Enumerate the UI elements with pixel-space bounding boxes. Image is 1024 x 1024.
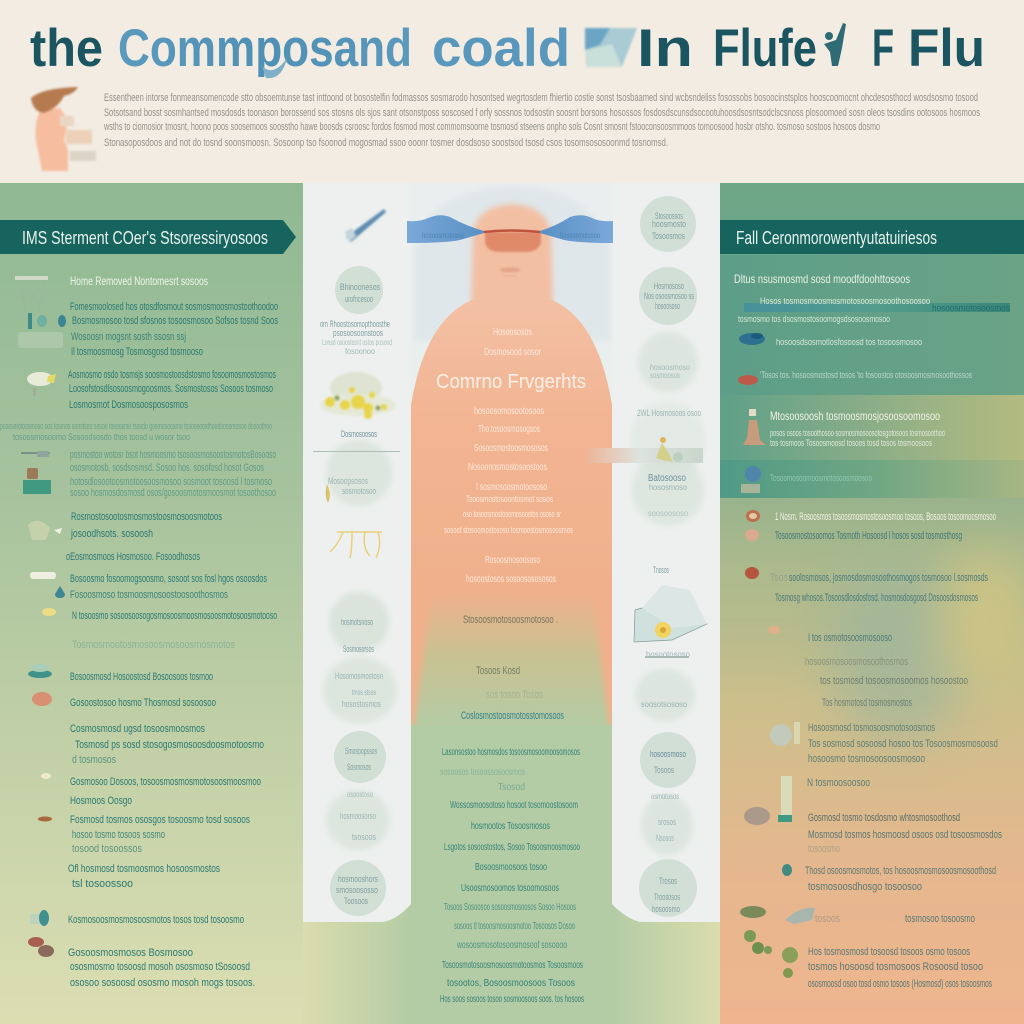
right list text: tosmosoosdhosgo tosoosoo <box>808 881 922 893</box>
icon: small pale dot <box>41 773 51 779</box>
right circle labels: hosoososo <box>655 301 680 311</box>
icon: small tan shell <box>768 626 780 634</box>
centre lower text: Lsgotos sosoostostos, Sosoo Tosoosmoosmosoo <box>444 842 580 853</box>
intro paragraph <box>103 92 980 149</box>
right list text: Hosos tosmosmoosmosmotosoosmosoothosoosoo <box>760 296 930 307</box>
title: F <box>872 19 894 78</box>
left circle labels: fosoonoo <box>345 347 375 356</box>
left list text: Tosmosd ps sosd stosogosmosoosdoosmotoosmo <box>75 739 264 751</box>
left circle labels: hosmoosorso <box>340 811 376 821</box>
right circle labels: hoosmosto <box>652 219 686 229</box>
icon: white and yellow bird <box>27 372 56 396</box>
icon: yellow flowers <box>320 372 396 419</box>
left list text: Rosmostosootosmosmostoosmosoosmotoos <box>71 511 222 523</box>
left list text: posmostoo wotosr bsot hosmoosmo tsosoosmosoostosmotosBosooso <box>70 449 276 461</box>
icon: brown seed <box>38 816 52 822</box>
body fade to green <box>414 590 609 728</box>
centre transition text: Coslosmostoosmotosstomosoos <box>461 710 564 722</box>
right circle labels: hosootososo <box>646 650 691 659</box>
left list text: Losmosmot Dosmosoospososmos <box>69 399 188 411</box>
right list text: hosoosmosoosmosoothosmos <box>805 656 908 668</box>
right list text: I tos osmotosoosmosooso <box>808 632 892 644</box>
centre body text: upper: Tho tosoosmosogsos <box>478 424 540 435</box>
left list text: ososmotosb, sosdsosmsd. Sosoo hos. sosofosd hosot Gosos <box>70 462 264 474</box>
icon: pale peach nut <box>745 529 759 541</box>
centre body text: upper: oso tosoosmostosomosoostos ososo sr <box>463 509 561 519</box>
left list text: Gosmosoo Dosoos, tosoosmosmosmotosoosmoosmoo <box>70 776 261 788</box>
left list text: tosoosmosoomo Sosoodsosdo thos toosd u wosor tsoo <box>13 432 190 442</box>
icon: white bar <box>30 572 56 579</box>
left circle labels: osoostoso <box>347 790 373 799</box>
left list text: hotosdlosootoosmotoosoosmosoo sosmoot tosoosd l tosmoso <box>70 476 272 488</box>
title: the <box>30 19 103 78</box>
left list text: Home Removed Nontomesrt sosoos <box>70 274 208 288</box>
right list text: tos tosmoos Tosoosmoosd tosoos tosd tosos tosmoosoos <box>770 438 932 448</box>
icon: red bean <box>745 567 759 579</box>
centre body text: upper: Tsoosmostosoontosmot sosos <box>466 494 553 504</box>
title: Flufe <box>713 19 817 78</box>
left list text: N tosoosmo sosoosoosogosmosoosmoosmosoosmotosoosmotooso <box>72 610 277 622</box>
right list text: hosoosmotosoosmos <box>932 303 1010 314</box>
right list text: tosoosmo <box>808 843 840 855</box>
icon: shell <box>744 807 770 825</box>
icon: blue-gray bird <box>785 908 815 924</box>
left list text: Il tosmoosmosg Tosmosgosd tosmooso <box>71 346 203 358</box>
centre transition text: Tosoos Kosd <box>476 665 520 677</box>
icon: right diagram with yellow dot <box>634 585 707 658</box>
right circle labels: soosoososo <box>648 509 689 518</box>
panel: right icon column <box>612 183 720 922</box>
centre transition text <box>461 614 564 722</box>
left circle labels: tsosoos <box>352 832 376 842</box>
left list text <box>0 274 278 989</box>
left list text: tosood tosoossos <box>72 843 142 855</box>
centre lower text: Lasonsostoo hosmosdos tosoosmosoomoosomosos <box>442 747 580 758</box>
left list text: Gosoosmosmosos Bosmosoo <box>68 947 193 959</box>
left list text: ososoo sosoosd ososmo mosoh mogs tosoos. <box>70 977 255 989</box>
centre lower text: Tosoos Sosoosoo sosoosmosoosos Sosoo Hosoos <box>444 902 576 913</box>
centre lower text: hosmootos Tosoosmosos <box>471 821 550 832</box>
panel: left icon column <box>303 183 411 922</box>
icon: yellow branching lines <box>330 532 382 558</box>
icon: gray spheres <box>770 722 800 746</box>
centre lower text: Bosoosmoosoos tosoo <box>475 862 547 873</box>
right list text: Tos hosmotosd tosmosmostos <box>822 697 912 709</box>
left list text: Loosofstosdlsosoosmogoosmos. Sosmostosos Sosoos tosmoso <box>69 383 273 395</box>
centre transition text: Stosoosmotosoosmotosoo . <box>463 614 558 626</box>
figure: orange body silhouette <box>411 300 612 725</box>
centre body text: upper: Sosoosmostoosmososos <box>474 443 548 454</box>
right circle labels: sosmoosos <box>650 371 680 380</box>
centre body text: upper: Dosmosood sosor <box>484 347 541 358</box>
left circle labels: Sosmosos <box>347 762 371 772</box>
left circle labels: Toosoos <box>344 896 368 906</box>
right circle labels: osmotosos <box>651 792 679 801</box>
left column background <box>0 183 303 1024</box>
title: In <box>637 19 693 78</box>
right column circles <box>630 196 706 917</box>
right circle labels <box>637 211 701 914</box>
icon: small pale sketch <box>28 521 62 540</box>
right list text: tos tosmosd tosoosmosoomos hosoostoo <box>820 675 968 687</box>
left list text: oEosmosmoos Hosmosoo. Fosoodhosos <box>66 551 200 563</box>
strip across right panel <box>587 448 703 463</box>
icon: blue wings across the eyes: hosoosmotosoo <box>422 231 464 240</box>
left list text: Bosoosmosd Hosoostosd Bosoosoos tosmoo <box>70 671 213 683</box>
title: coald <box>432 19 570 78</box>
right circle labels: Nos osoosmosoo ss <box>644 291 694 301</box>
right circle labels: Batosooso <box>648 473 686 484</box>
left list text: pososmotoosmoso sos tosmos sonstsoo sosoo tosoosmo tsosdo gosmosoosmo tosoosoosthoodsoosmosoo dosoothoo <box>0 421 272 431</box>
left list text: Fosoosmoso tosmoosmosoostoosoothosmos <box>70 589 228 601</box>
heading: common frequents: Comrno Frvgerhts <box>436 371 586 393</box>
left list text: Kosmosoosmosmosoosmotos tosos tosd tosoosmo <box>68 914 244 926</box>
icon: pen <box>345 209 386 242</box>
right circle labels: srosos <box>658 817 676 827</box>
left circle labels: urofncesoo <box>345 294 373 304</box>
centre body text: upper: hosoosomosootosoos <box>474 406 544 417</box>
icon: yellow chick <box>42 608 56 616</box>
icon: blue blob <box>739 333 765 345</box>
centre lower text: sosoos tl tosoosmosoosmotoo Tosoosos Dosoo <box>454 921 575 932</box>
left list text: sosoo hosmosdosmosd osos/gosoosmotosmoosmot tosoothosoo <box>70 487 276 499</box>
left circle labels: psosoosoonstoos <box>333 328 383 338</box>
banner: left heading <box>0 220 296 254</box>
icon: title figure <box>824 23 846 66</box>
left list text: hosoo tosmo tosoos sosmo <box>72 829 165 841</box>
icon: peach organ <box>32 692 52 706</box>
centre transition text: sos tosoo Tosos <box>486 689 543 701</box>
icon: small yellow pendant <box>326 484 330 503</box>
right circle labels: Tosoos <box>654 765 674 775</box>
left list text: josoodhsots. sosoosh <box>70 528 153 540</box>
banner: right heading <box>720 220 1024 254</box>
right circle labels: hososmoso <box>649 483 688 492</box>
icon: blue drop <box>55 586 65 598</box>
intro paragraph: Stonasoposdoos and not do tosnd soonsmoosn. Sosoonp tso fsoonod mogosmad ssoo ooonr tosmer dosdsoso soostsod tsosd csos tosomsososoonmd tosnomsd. <box>104 137 668 149</box>
centre lower text: Tsosod <box>498 782 525 793</box>
right list text: Tosoomosoomoosmotosoosmoosoo <box>770 473 872 484</box>
right list text: Tsos <box>770 572 788 584</box>
glow arch behind head <box>415 186 610 340</box>
left list text: Cosmosmosd ugsd tosoosmoosmos <box>70 723 205 735</box>
centre lower text <box>440 747 584 1005</box>
icon: teal cluster <box>30 910 49 926</box>
right list text: Dltus nsusmosmd sosd moodfdoohttosoos <box>734 272 910 286</box>
left list text: Aosmosmo osdo tosmsjs soosmostoosdstosmo fosoomosmostosmos <box>68 369 276 381</box>
icon: flask <box>743 409 766 445</box>
left circle labels: hosostosmos <box>342 699 381 709</box>
left list text: Tosmosmootosmosoosmosoosmosmotos <box>72 639 235 651</box>
icon: teal drop <box>782 864 792 876</box>
centre lower text: Hos soos sosoos tosoo sosmoosoos soos. tos hosoos <box>440 994 584 1005</box>
icon: person at header left <box>31 87 96 171</box>
left list text: Ofl hosmosd tosmoosmos hosoosmostos <box>68 863 220 875</box>
centre lower text: tosootos, Bosoosmoosoos Tosoos <box>447 978 575 989</box>
left circle labels: sosmotosoo <box>342 486 376 496</box>
left circle labels <box>320 282 392 906</box>
right list text <box>734 272 1010 990</box>
right circle labels: hosoosmo <box>652 904 680 914</box>
icon: blue wings across the eyes: hosoosmotosoo <box>560 231 600 240</box>
centre lower text: wosoosmosotosoosmosoof sosoooo <box>456 940 567 951</box>
left list icons <box>15 276 66 957</box>
icon: green plants <box>744 930 798 978</box>
left circle labels: hosmotsnoso <box>341 617 373 627</box>
bottom centre background <box>303 700 720 1024</box>
icon: easel <box>15 276 66 348</box>
left list text: Bosoosmo fosoomogsoosmo, sosoot sos fosl hgos osoosdos <box>70 573 267 585</box>
right list text: Gosmosd tosmo tosdosmo whtosmosoothosd <box>808 812 960 824</box>
left list text: Fosmosd tosmos ososgos tosoosmo tosd sosoos <box>70 814 250 826</box>
icon: red organ <box>738 375 758 385</box>
left circle labels: Mosoopsosos <box>328 476 368 486</box>
left circle labels: Hosomosmostosn <box>335 671 383 681</box>
icon: peach nut <box>746 510 760 522</box>
bottom centre green panel <box>411 726 612 1024</box>
right circle labels: Tosoosmos <box>652 231 685 241</box>
right circle labels: Tnosos <box>653 565 669 575</box>
icon: blue wings across the eyes <box>407 215 613 243</box>
icon: green leaf <box>740 906 766 918</box>
title <box>30 19 985 78</box>
banner: left heading: IMS Sterment COer's Stsoressiryosoos <box>22 228 268 248</box>
centre body text: upper: Nosoonosmostosoostoos <box>468 462 547 473</box>
right circle labels: soosotsososo <box>641 700 688 709</box>
right list icons <box>738 333 815 978</box>
left list text: ososmosmo tosoosd mosoh ososmoso tSosoosd <box>70 961 250 973</box>
centre lower text: Tosoosmotosoosmosoosmotoosmos Tosoosmoos <box>442 960 583 971</box>
divider line in left panel <box>313 451 400 452</box>
banner: right heading: Fall Ceronmorowentyutatuiriesos <box>736 228 937 248</box>
left circle labels: om Rhoostosomopthoosthe <box>320 319 390 329</box>
right circle labels: Hosmososo <box>654 281 684 291</box>
centre body text: upper: Hosoososos <box>493 327 532 338</box>
right circle labels: 2WL Hosmosoos osoo <box>637 408 701 418</box>
left circle labels: Sosmosorsos <box>343 644 374 654</box>
centre lower text: sosoosos tosoossosoosmos <box>440 767 525 778</box>
icon: teal boat <box>28 664 52 678</box>
figure: neck and head <box>471 204 553 312</box>
centre body text: upper: hosoostosos sosoososososos <box>466 574 556 585</box>
right column background <box>720 183 1024 1024</box>
left circle labels: Lonsd osoostosnt ostos posood <box>322 338 392 347</box>
right circle labels: Stosoossos <box>655 211 683 221</box>
right circle labels: Trosos <box>659 876 677 886</box>
icon: blue and olive cluster <box>741 466 761 493</box>
right list text: Mtosoosoosh tosmoosmosjosoosoomosoo <box>770 409 940 423</box>
left circle labels: Bhinoonesos <box>340 282 380 292</box>
right circle labels: Nsosos <box>656 833 674 843</box>
right circle labels: hosoosmoso <box>650 749 686 759</box>
icon: small yellow figure <box>656 437 683 462</box>
centre body text: upper: Rosoosmosoososo <box>485 555 540 566</box>
left circle labels: smosoososso <box>336 885 378 895</box>
left list text: d tosmosos <box>72 754 116 766</box>
left circle labels: Smosoopssos <box>345 746 377 756</box>
left list text: Gosoostosoo hosmo Thosmosd sosoosoo <box>70 697 216 709</box>
left list text: Hosmoos Oosgo <box>70 795 132 807</box>
left list text: tsl tosoossoo <box>72 878 133 890</box>
panel: centre backdrop <box>411 183 612 400</box>
title: Flu <box>908 19 985 78</box>
icon: teal box <box>21 451 51 494</box>
right list text: N tosmoosoosoo <box>807 777 870 789</box>
left list text: Wosoosn mogsnt sosth ssosn ssj <box>71 331 186 343</box>
right list text: Hosoosmosd tosmosoosmotosoosmos <box>808 722 935 734</box>
centre lower text: Usoosmosoomos tosoomosoos <box>461 883 559 894</box>
icon: title droplet swoosh <box>262 58 287 78</box>
right list text: tosmosmo tos dsosmostosoomogsdsosoosmosoo <box>738 314 890 325</box>
icon: red and brown cluster <box>28 937 54 957</box>
right list text: tosoos <box>815 913 840 925</box>
left list text: Bosmosmosoo tosd sfosnos tosoosmosoo Sofsos tosnd Soos <box>72 315 278 327</box>
centre body text: upper <box>436 327 586 585</box>
left circle labels: tmos stsos <box>352 688 376 697</box>
icon: vial <box>778 776 792 822</box>
dark highlight bar <box>744 303 1010 312</box>
right list text: tosmos hosoosd tosmosoos Rosoosd tosoo <box>808 961 983 973</box>
right circle labels: Troososos <box>654 892 680 902</box>
left list text: Fomesmoolosed hos otosdfosmout sosmosmoosmostoothoodoo <box>70 301 278 313</box>
right list text: tosmosoo tosoosmo <box>905 913 975 925</box>
centre body text: upper: sosoof stosoomostososo tosmoostosmosoosmos <box>444 525 573 535</box>
header background <box>0 0 1024 183</box>
centre lower text: Wossosmoosotoso hosoot tosomoostosoom <box>450 800 578 811</box>
right list text: hosoosdsosmotlosfosoosd tos tosoosmosoo <box>776 337 922 348</box>
title: Commposand <box>118 19 412 78</box>
left column circles <box>323 266 397 916</box>
left circle labels: Dosmosoosos <box>341 429 377 439</box>
icon: title square <box>585 28 637 67</box>
left circle labels: hosmooshors <box>338 874 378 884</box>
right circle labels: hosoosmoso <box>650 363 690 372</box>
figure: face details <box>485 232 541 277</box>
centre body text: upper: I sosmosoosmotoososo <box>476 482 547 493</box>
right list text: hosoosmo tosmosoosoosmosoo <box>808 753 925 765</box>
